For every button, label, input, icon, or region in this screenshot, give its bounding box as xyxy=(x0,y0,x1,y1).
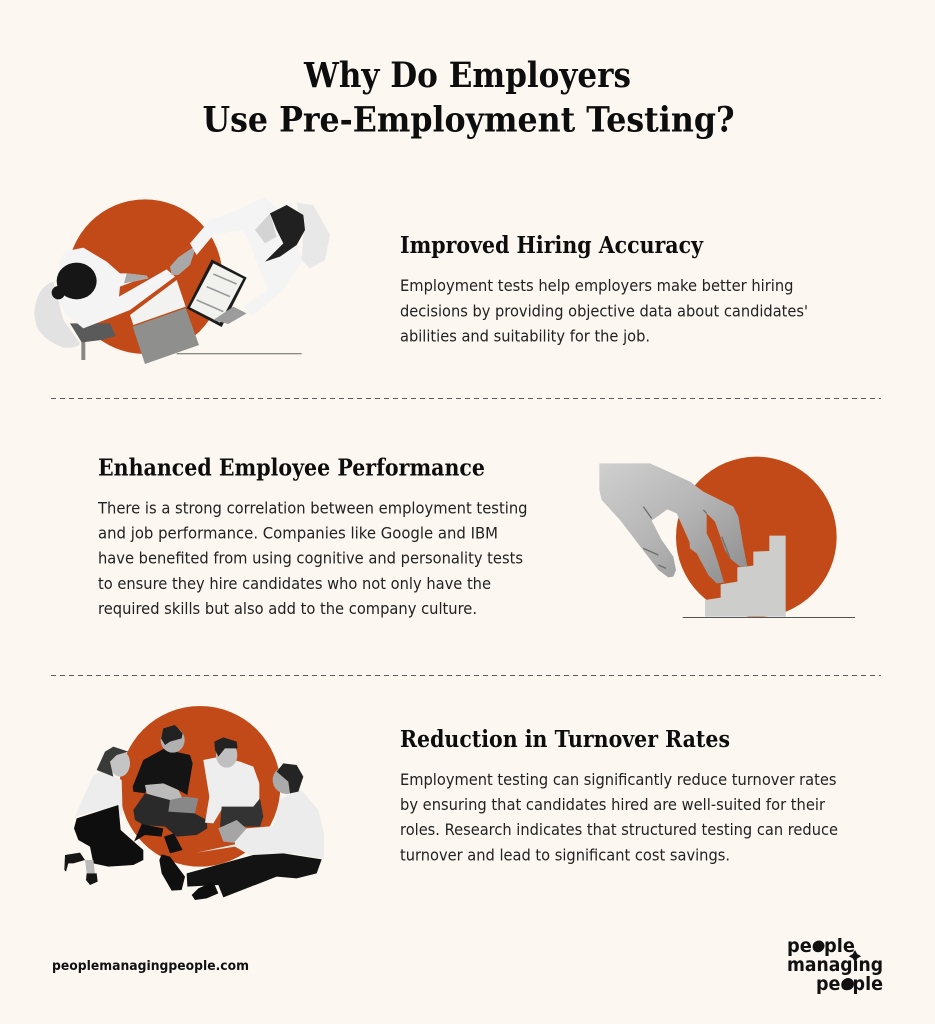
body text: required skills but also add to the company culture. xyxy=(98,600,477,618)
body text xyxy=(400,771,838,864)
heading: Improved Hiring Accuracy xyxy=(400,232,704,259)
body text: by ensuring that candidates hired are well-suited for their xyxy=(400,796,826,814)
illustration: hand on stairs xyxy=(599,457,855,618)
panel: reduction in turnover rates xyxy=(64,706,838,900)
heading: Reduction in Turnover Rates xyxy=(400,726,730,753)
title xyxy=(202,55,734,140)
heading: Enhanced Employee Performance xyxy=(98,454,485,482)
logo: people xyxy=(787,935,855,957)
panel: enhanced employee performance xyxy=(97,454,855,618)
logo: people xyxy=(816,973,883,995)
title: Why Do Employers xyxy=(303,55,631,96)
body text: roles. Research indicates that structured testing can reduce xyxy=(400,821,838,839)
body text: Employment testing can significantly reduce turnover rates xyxy=(400,771,836,789)
footer url: peoplemanagingpeople.com xyxy=(52,959,249,974)
illustration: team sitting on the floor xyxy=(64,706,324,900)
body text xyxy=(97,500,528,618)
body text: turnover and lead to significant cost savings. xyxy=(400,846,730,864)
body text: There is a strong correlation between employment testing xyxy=(97,500,528,518)
body text: to ensure they hire candidates who not only have the xyxy=(98,575,491,593)
body text: Employment tests help employers make better hiring xyxy=(400,277,794,295)
body text: decisions by providing objective data about candidates' xyxy=(400,302,808,320)
illustration: handshake from above xyxy=(34,198,330,364)
body text: abilities and suitability for the job. xyxy=(400,328,650,346)
body text: and job performance. Companies like Google and IBM xyxy=(98,524,498,542)
logo xyxy=(787,935,883,995)
logo: managing xyxy=(787,954,883,976)
panel: improved hiring accuracy xyxy=(34,198,808,364)
body text: have benefited from using cognitive and personality tests xyxy=(98,550,523,568)
title: Use Pre-Employment Testing? xyxy=(202,100,734,140)
body text xyxy=(400,277,808,346)
